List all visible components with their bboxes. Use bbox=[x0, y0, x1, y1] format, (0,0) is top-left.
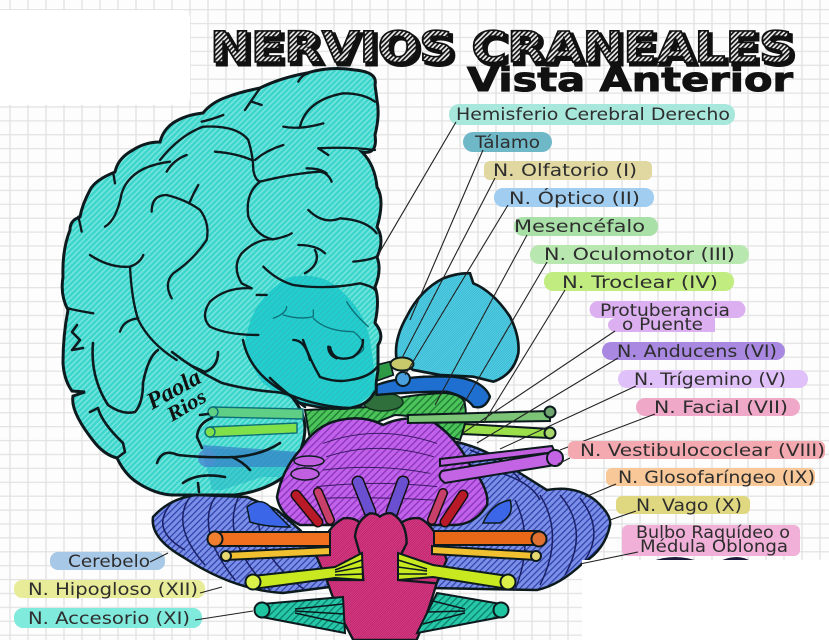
label: Hemisferio Cerebral Derecho: Hemisferio Cerebral Derecho bbox=[456, 105, 730, 124]
lower brain nerve roots bbox=[198, 407, 303, 490]
label: N. Vago (X) bbox=[610, 496, 750, 520]
label: N. Troclear (IV): N. Troclear (IV) bbox=[562, 273, 718, 292]
label: Cerebelo: Cerebelo bbox=[68, 552, 150, 571]
white patch bottom right bbox=[582, 560, 829, 640]
label: Bulbo Raquídeo o Médula Oblonga: Médula Oblonga bbox=[640, 537, 788, 556]
title: NERVIOS CRANEALES bbox=[210, 23, 794, 73]
label: N. Olfatorio (I) bbox=[402, 161, 652, 358]
label: Protuberancia o Puente: o Puente bbox=[622, 315, 703, 334]
label: Hemisferio Cerebral Derecho bbox=[378, 104, 735, 255]
medulla oblongata bbox=[317, 513, 447, 640]
flocculus bbox=[247, 500, 511, 527]
temporal lobe sulci bbox=[243, 340, 377, 408]
label: N. Vestibulococlear (VIII) bbox=[558, 441, 825, 464]
label: N. Óptico (II): N. Óptico (II) bbox=[509, 189, 640, 208]
label: N. Accesorio (XI) bbox=[14, 608, 253, 628]
label: N. Oculomotor (III) bbox=[460, 245, 749, 410]
temporal lobe bbox=[245, 276, 375, 408]
label: N. Óptico (II) bbox=[405, 188, 654, 375]
label: N. Accesorio (XI): N. Accesorio (XI) bbox=[28, 609, 190, 628]
label: N. Glosofaríngeo (IX) bbox=[585, 468, 815, 497]
label: Cerebelo bbox=[50, 552, 168, 571]
label: N. Trígemino (V): N. Trígemino (V) bbox=[634, 370, 786, 389]
label: N. Facial (VII) bbox=[560, 398, 800, 450]
label: N. Hipogloso (XII) bbox=[14, 580, 222, 599]
label: N. Glosofaríngeo (IX): N. Glosofaríngeo (IX) bbox=[618, 468, 815, 487]
label: Tálamo bbox=[410, 132, 552, 320]
label: Bulbo Raquídeo o Médula Oblonga: Bulbo Raquídeo o bbox=[636, 523, 790, 542]
label: N. Troclear (IV) bbox=[484, 272, 734, 422]
label: Tálamo: Tálamo bbox=[474, 133, 540, 152]
midbrain green bbox=[305, 393, 466, 440]
trochlear and oculomotor nerves bbox=[408, 406, 556, 438]
vagus nerve X bbox=[221, 546, 541, 561]
olfactory bulb bbox=[390, 358, 414, 370]
label: Protuberancia o Puente bbox=[463, 301, 746, 433]
dark blobs under bulbo label bbox=[650, 557, 752, 562]
title: NERVIOS CRANEALES bbox=[213, 26, 797, 76]
mesencephalon dark centre bbox=[363, 393, 403, 411]
pons bbox=[277, 418, 487, 525]
signature: Rios bbox=[161, 384, 211, 427]
label: N. Trígemino (V) bbox=[500, 370, 808, 449]
accessory nerve XI bbox=[254, 593, 508, 633]
thalamus bbox=[370, 273, 519, 407]
label: N. Oculomotor (III): N. Oculomotor (III) bbox=[544, 245, 735, 264]
label: Mesencéfalo: Mesencéfalo bbox=[514, 217, 645, 236]
label: N. Vestibulococlear (VIII): N. Vestibulococlear (VIII) bbox=[580, 441, 825, 460]
label: Mesencéfalo bbox=[435, 217, 658, 405]
glossopharyngeal nerve IX bbox=[208, 531, 546, 546]
subtitle: Vista Anterior bbox=[467, 60, 794, 99]
left and right nerve tubes bbox=[208, 406, 563, 633]
cerebellum bbox=[153, 442, 610, 593]
label: N. Olfatorio (I): N. Olfatorio (I) bbox=[493, 161, 637, 180]
lower brain sulci bbox=[72, 325, 305, 492]
label: Bulbo Raquídeo o Médula Oblonga bbox=[580, 523, 800, 564]
label: N. Vago (X): N. Vago (X) bbox=[636, 496, 742, 515]
signature: Paola bbox=[141, 364, 206, 416]
small nerves on pons bbox=[296, 482, 463, 522]
optic nerve ball bbox=[396, 372, 410, 386]
label: N. Facial (VII): N. Facial (VII) bbox=[654, 398, 788, 417]
brain sulci upper bbox=[68, 73, 377, 360]
label: N. Hipogloso (XII): N. Hipogloso (XII) bbox=[28, 580, 198, 599]
label: N. Anducens (VI) bbox=[477, 342, 785, 443]
label: N. Anducens (VI): N. Anducens (VI) bbox=[617, 342, 777, 361]
white patch top left bbox=[0, 10, 190, 105]
optic tract blue bbox=[377, 376, 490, 407]
hypoglossal nerve XII bbox=[246, 553, 516, 590]
vestibulocochlear and facial nerves bbox=[440, 446, 563, 483]
label: Protuberancia o Puente: Protuberancia bbox=[600, 301, 730, 320]
